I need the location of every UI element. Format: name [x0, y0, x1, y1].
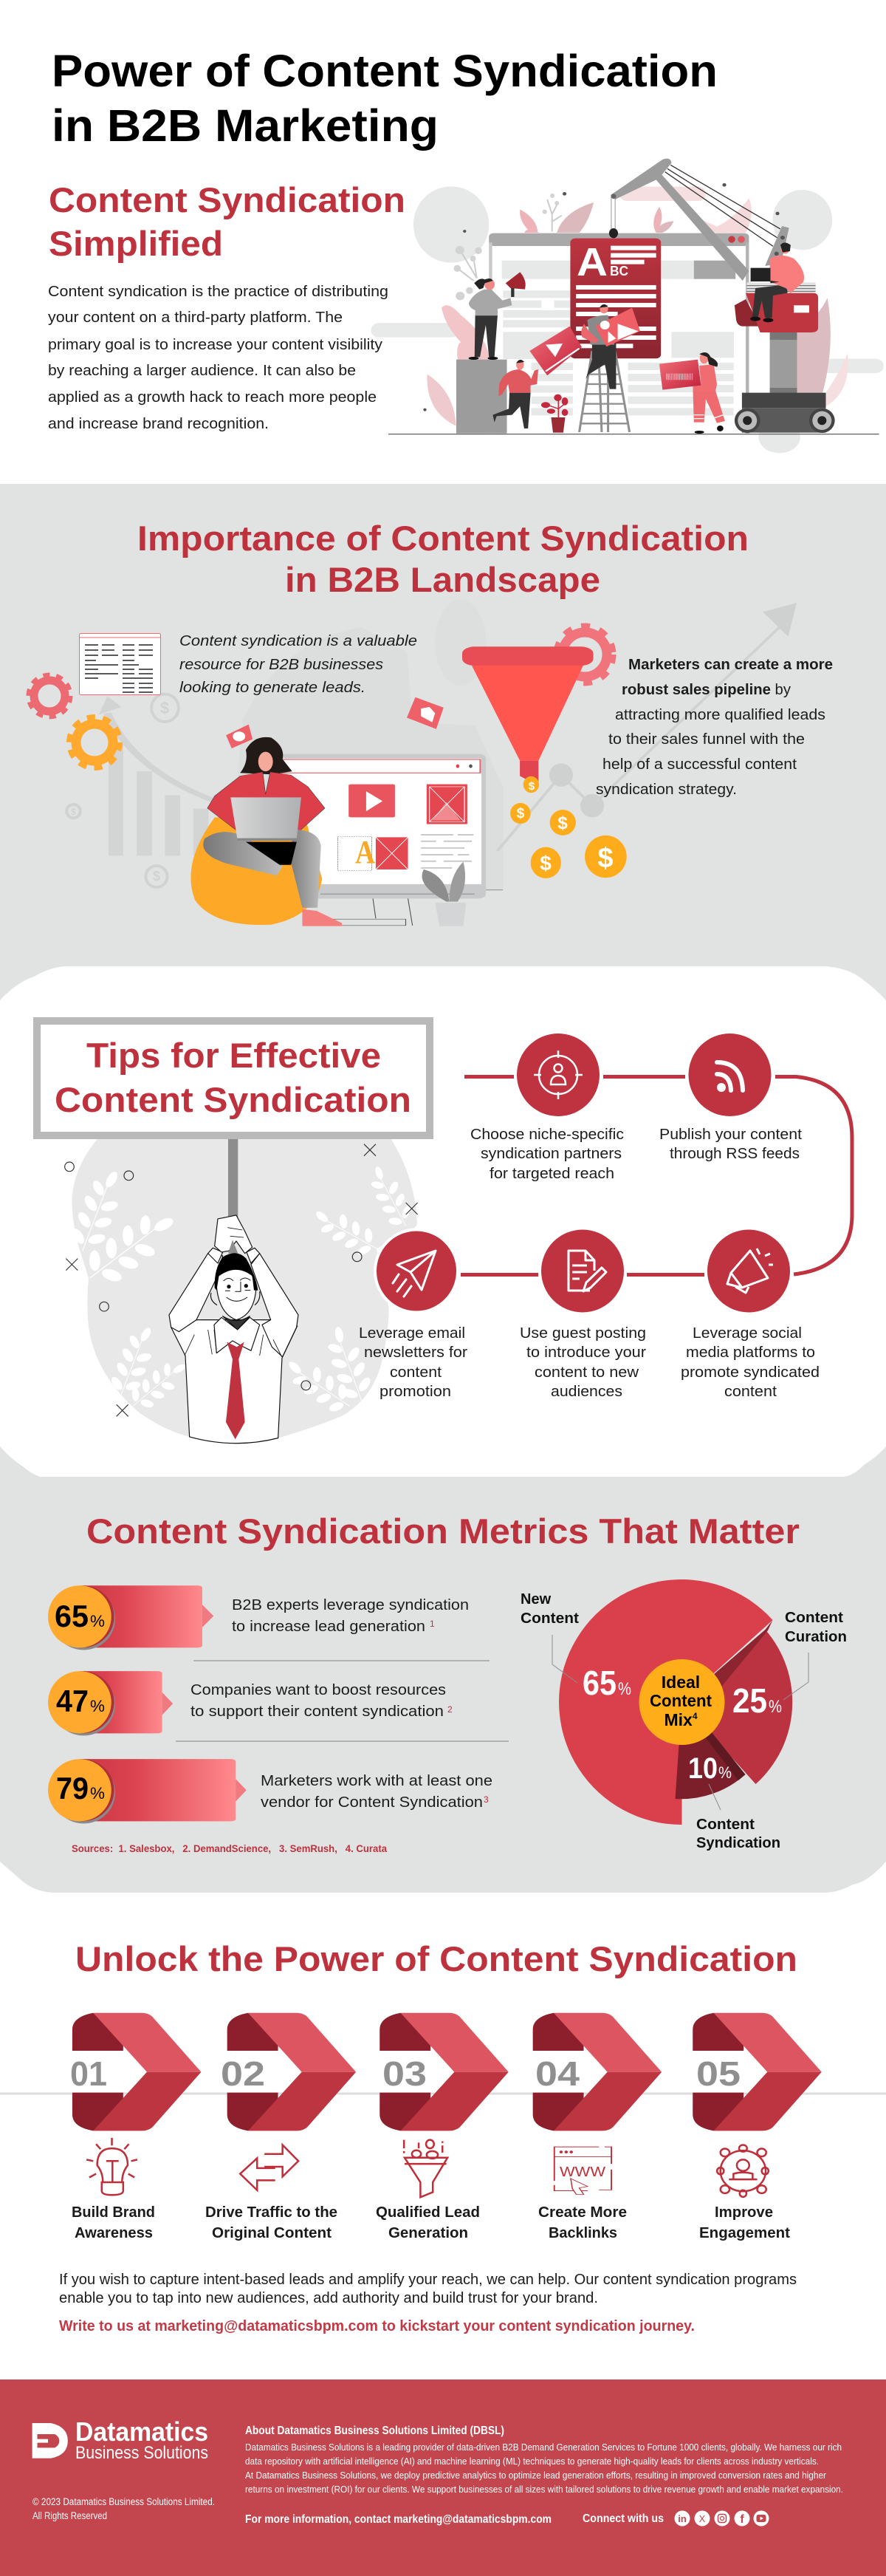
tip 2: rss: through RSS feeds [670, 1145, 800, 1162]
video card [529, 327, 582, 375]
footer panel [0, 2379, 886, 2576]
illustration: woman, monitor: $ [557, 813, 568, 833]
illustration: crane and content team: A [577, 240, 608, 284]
text block: valuable resource: looking to generate leads. [179, 679, 365, 696]
sign pole [228, 1139, 238, 1218]
text block: valuable resource: Content syndication is a valuable [179, 632, 417, 649]
social icons: f [740, 2513, 744, 2526]
icon: transfer arrows [240, 2145, 298, 2190]
heading: importance: Importance of Content Syndication [137, 519, 749, 558]
potted plant [435, 903, 466, 926]
metric: 47%: 2 [447, 1704, 453, 1715]
sources: Sources: 1. Salesbox, 2. DemandScience, 3. SemRush, 4. Curata [72, 1843, 387, 1854]
tip 3: social media: media platforms to [686, 1344, 815, 1361]
metric: 79%: % [90, 1784, 105, 1803]
social icons: in [678, 2513, 687, 2524]
tip 5: email newsletters: promotion [380, 1383, 451, 1400]
pie chart: ideal content mix: Content [696, 1817, 755, 1833]
logo: Business Solutions [75, 2443, 208, 2463]
heading: content syndication simplified: Simplified [49, 224, 223, 263]
woman with music card [693, 390, 725, 423]
metric: 79%: 79 [56, 1771, 89, 1805]
icon: pink gear [556, 626, 614, 683]
chevron 05: 05 [696, 2054, 741, 2093]
pie chart: ideal content mix: Mix [664, 1710, 693, 1729]
text block: definition: applied as a growth hack to reach more people [48, 389, 377, 406]
text block: definition [48, 283, 388, 432]
section background: white tips panel [0, 966, 886, 1477]
red document [570, 239, 661, 358]
step labels: Backlinks [549, 2225, 617, 2241]
step labels: Original Content [212, 2225, 332, 2241]
pie chart: ideal content mix: Content [650, 1691, 712, 1710]
tip 1: niche partners: Choose niche-specific [470, 1126, 624, 1143]
illustration: woman, monitor: $ [517, 806, 525, 821]
metric: 79%: vendor for Content Syndication [261, 1794, 483, 1811]
plant pot [551, 417, 565, 433]
icon: text document [80, 634, 161, 694]
text block: valuable resource [179, 632, 417, 696]
text block: definition: by reaching a larger audience. It can also be [48, 362, 356, 379]
chevron 01 [70, 2013, 201, 2131]
text block: sales pipeline: syndication strategy. [596, 781, 737, 798]
step labels: Create More [538, 2204, 627, 2221]
connect label: Connect with us [583, 2512, 664, 2525]
pie chart: ideal content mix: Curation [785, 1629, 847, 1645]
connector path [461, 1077, 852, 1275]
illustration: man holding sign [65, 1139, 419, 1444]
seated man [752, 284, 787, 318]
metric: 65%: 65 [55, 1599, 89, 1633]
text block: call to action: enable you to tap into new audiences, add authority and build trust for your brand. [59, 2289, 598, 2306]
metric: 65%: % [90, 1612, 105, 1630]
illustration background: faint chart and arrows: $ [71, 807, 76, 817]
title [52, 46, 718, 151]
chevron 02: 02 [221, 2054, 265, 2093]
heading: importance [137, 519, 749, 599]
tip 4: guest posting [520, 1229, 646, 1400]
metric: 79%: Marketers work with at least one [261, 1772, 492, 1789]
chevron 04: 04 [535, 2054, 580, 2093]
metric: 65%: to increase lead generation [232, 1618, 425, 1635]
illustration: woman, monitor: $ [597, 843, 614, 874]
tip 5: email newsletters [359, 1229, 467, 1400]
copyright: © 2023 Datamatics Business Solutions Limited. [32, 2496, 215, 2507]
step labels: Build Brand [72, 2204, 155, 2221]
tip 1: niche partners [470, 1034, 624, 1182]
step labels: Engagement [699, 2225, 790, 2241]
text block: valuable resource: resource for B2B businesses [179, 656, 383, 673]
logo [32, 2416, 208, 2463]
coins [523, 776, 539, 793]
crane cab [735, 299, 760, 327]
pie chart: ideal content mix: 25 [732, 1681, 767, 1720]
icon: funnel [404, 2140, 447, 2197]
chevron 01: 01 [70, 2054, 107, 2093]
pie chart: ideal content mix: % [769, 1697, 782, 1717]
tip 4: guest posting: to introduce your [526, 1344, 646, 1361]
pie chart: ideal content mix: Syndication [696, 1835, 780, 1851]
text block: sales pipeline [596, 656, 833, 798]
text block: sales pipeline: Marketers can create a more [628, 656, 833, 673]
pie chart: ideal content mix [521, 1579, 847, 1851]
heading: unlock: Unlock the Power of Content Syndication [75, 1939, 797, 1978]
metric: 65%: 1 [430, 1619, 435, 1629]
contact line: For more information, contact marketing@datamaticsbpm.com [245, 2513, 552, 2526]
copyright [32, 2496, 215, 2521]
tip 3: social media: promote syndicated [681, 1364, 820, 1381]
pie chart: ideal content mix: 65 [583, 1664, 617, 1702]
tip 1: niche partners: for targeted reach [490, 1165, 614, 1182]
text block: definition: your content on a third-party platform. The [48, 309, 343, 326]
about text: About Datamatics Business Solutions Limited (DBSL) [245, 2425, 504, 2437]
browser window [489, 233, 749, 434]
chevron 02 [221, 2013, 356, 2131]
text block: definition: Content syndication is the practice of distributing [48, 283, 388, 300]
logo: Datamatics [75, 2416, 208, 2447]
illustration background: faint chart and arrows: $ [160, 699, 169, 717]
about text: At Datamatics Business Solutions, we deploy predictive analytics to optimize lead generation efforts, resulting in improved conversion rates and higher [245, 2470, 827, 2481]
title: in B2B Marketing [52, 100, 439, 151]
step labels: Awareness [75, 2225, 153, 2241]
tip 2: rss: Publish your content [659, 1126, 802, 1143]
illustration: woman, monitor: $ [529, 780, 535, 793]
pie chart: ideal content mix: Ideal [662, 1673, 700, 1692]
metric: 65% [48, 1585, 469, 1650]
pie chart: ideal content mix: % [718, 1763, 732, 1782]
tip 3: social media: Leverage social [693, 1325, 802, 1342]
icon: www browser: WWW [560, 2165, 605, 2179]
about text: returns on investment (ROI) for our clients. We support businesses of all sizes with tailored solutions to drive revenue growth and enable market expansion. [245, 2484, 843, 2495]
pie chart: ideal content mix: % [618, 1679, 631, 1699]
metric: 47% [48, 1671, 453, 1735]
pie chart: ideal content mix: New [521, 1591, 552, 1608]
text block: definition: primary goal is to increase your content visibility [48, 336, 383, 353]
crane [611, 159, 749, 281]
icon: red gear [29, 675, 70, 717]
illustration: woman, monitor: A [355, 834, 375, 870]
metric: 65%: B2B experts leverage syndication [232, 1596, 469, 1613]
social icons [675, 2510, 769, 2527]
tip 5: email newsletters: content [390, 1364, 442, 1381]
heading: content syndication simplified [49, 180, 405, 263]
tip 5: email newsletters: Leverage email [359, 1325, 465, 1342]
metric: 79%: 3 [484, 1794, 489, 1805]
text block: call to action [59, 2271, 797, 2334]
illustration: crane and content team: BC [610, 264, 628, 279]
chevron 04 [533, 2013, 662, 2131]
icon: orange gear [69, 717, 120, 768]
metric: 47%: 47 [56, 1684, 89, 1718]
title: Power of Content Syndication [52, 46, 718, 96]
text block: sales pipeline: attracting more qualified leads [615, 706, 825, 723]
heading: content syndication simplified: Content Syndication [49, 180, 405, 219]
pie chart: ideal content mix: Content [521, 1610, 579, 1627]
about text: data repository with artificial intelligence (AI) and machine learning (ML) techniques to generate high-quality leads for clients across industry verticals. [245, 2456, 819, 2467]
metric: 47%: Companies want to boost resources [190, 1681, 446, 1698]
step labels: Generation [388, 2225, 468, 2241]
tip 4: guest posting: content to new [535, 1364, 639, 1381]
metric: 79% [48, 1759, 492, 1823]
about text [245, 2425, 843, 2495]
chevron 05 [693, 2013, 822, 2131]
chevron 03 [380, 2013, 509, 2131]
text block: definition: and increase brand recognition. [48, 415, 269, 432]
pie chart: ideal content mix: Content [785, 1610, 843, 1626]
illustration background: faint chart and arrows: $ [153, 869, 160, 884]
sign: tips heading: Tips for Effective [86, 1036, 381, 1075]
text block: call to action: Write to us at marketing@datamaticsbpm.com to kickstart your content syndication journey. [59, 2317, 695, 2334]
bean bag [190, 817, 322, 925]
icon: light bulb [86, 2138, 137, 2195]
tip 1: niche partners: syndication partners [481, 1145, 622, 1162]
illustration background: faint chart and arrows [66, 600, 797, 891]
woman [240, 737, 292, 774]
sign: tips heading [37, 1021, 430, 1135]
man pointing [516, 360, 524, 370]
monitor [277, 754, 486, 898]
monitor stand [328, 898, 413, 926]
step labels [72, 2204, 790, 2241]
pie chart: ideal content mix: 4 [693, 1711, 698, 1721]
tip 2: rss [659, 1034, 802, 1162]
illustration: woman, monitor [190, 646, 627, 926]
tip 3: social media: content [724, 1383, 777, 1400]
tip 4: guest posting: Use guest posting [520, 1325, 646, 1342]
step labels: Qualified Lead [376, 2204, 480, 2221]
illustration: woman, monitor: $ [540, 852, 552, 875]
text block: sales pipeline: help of a successful content [602, 756, 797, 773]
step labels: Improve [715, 2204, 773, 2221]
tip 4: guest posting: audiences [551, 1383, 622, 1400]
funnel [472, 666, 583, 761]
tip 3: social media [681, 1229, 820, 1400]
about text: Datamatics Business Solutions is a leading provider of data-driven B2B Demand Generation Services to Fortune 1000 clients, globally. We harness our rich [245, 2442, 842, 2453]
social icons: X [699, 2513, 706, 2524]
metric: 47%: to support their content syndication [190, 1703, 444, 1720]
icon: network person [717, 2145, 769, 2197]
ladder [580, 351, 630, 432]
text block: call to action: If you wish to capture intent-based leads and amplify your reach, we can help. Our content syndication programs [59, 2271, 797, 2288]
illustration: crane and content team [371, 159, 884, 453]
heading: importance: in B2B Landscape [285, 560, 600, 599]
heading: metrics: Content Syndication Metrics That Matter [86, 1511, 800, 1551]
man on ladder [585, 344, 616, 389]
copyright: All Rights Reserved [32, 2510, 107, 2521]
section background: grey band [0, 484, 886, 1893]
text block: sales pipeline: robust sales pipeline by [622, 681, 791, 698]
sign: tips heading: Content Syndication [55, 1080, 411, 1119]
step labels: Drive Traffic to the [205, 2204, 337, 2221]
social reactions [407, 697, 444, 729]
pie chart: ideal content mix: 10 [688, 1752, 718, 1785]
chevron 03: 03 [382, 2054, 427, 2093]
woman with megaphone [456, 360, 507, 434]
man [169, 1215, 298, 1444]
tip 5: email newsletters: newsletters for [364, 1344, 467, 1361]
icon: www browser [554, 2147, 611, 2194]
metric: 47%: % [90, 1697, 105, 1715]
text block: sales pipeline: to their sales funnel with the [608, 731, 805, 748]
